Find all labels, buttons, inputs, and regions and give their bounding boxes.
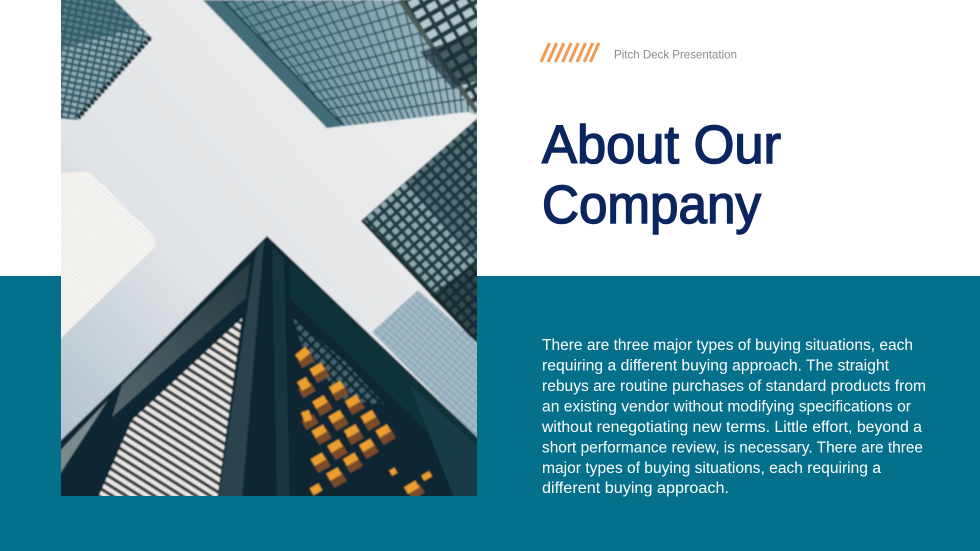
left striped window [97,318,242,500]
building: top left [56,0,152,120]
body paragraph: rebuys are routine purchases of standard products from [542,378,926,395]
title: About Our Company [542,115,781,235]
building: top right corner [400,0,482,115]
sky [61,0,477,442]
icon: orange diagonal stripes [541,43,599,62]
central pillar facets [218,240,264,500]
body paragraph: an existing vendor without modifying specifications or [542,398,911,416]
right window with orange reflections [293,317,453,500]
label: Pitch Deck Presentation: Pitch Deck Presentation [614,48,737,62]
body paragraph: without renegotiating new terms. Little effort, beyond a [541,419,922,436]
body paragraph [541,337,926,497]
background: white upper area [0,0,980,276]
left beam face [112,262,250,417]
building: right middle [362,114,482,347]
photo: skyscrapers seen from below [55,0,485,505]
body paragraph: requiring a different buying approach. The straight [542,358,890,374]
body paragraph: different buying approach. [542,480,729,497]
orange tiles [295,347,432,495]
tower mass [55,236,482,505]
body paragraph: short performance review, is necessary. There are three [542,440,923,456]
foreground tower [55,236,482,505]
title: About Our Company: Company [542,175,761,235]
right beam [290,264,477,446]
background: teal lower band [0,276,980,551]
orange tile shadows [297,352,425,500]
building: white left [56,172,155,343]
body paragraph: There are three major types of buying situations, each [542,337,913,354]
title: About Our Company: About Our [542,115,781,175]
building: top centre [200,0,480,130]
lower left beam sliver [61,400,108,474]
building: light blue lower right [372,290,482,443]
body paragraph: major types of buying situations, each requiring a [542,460,881,477]
